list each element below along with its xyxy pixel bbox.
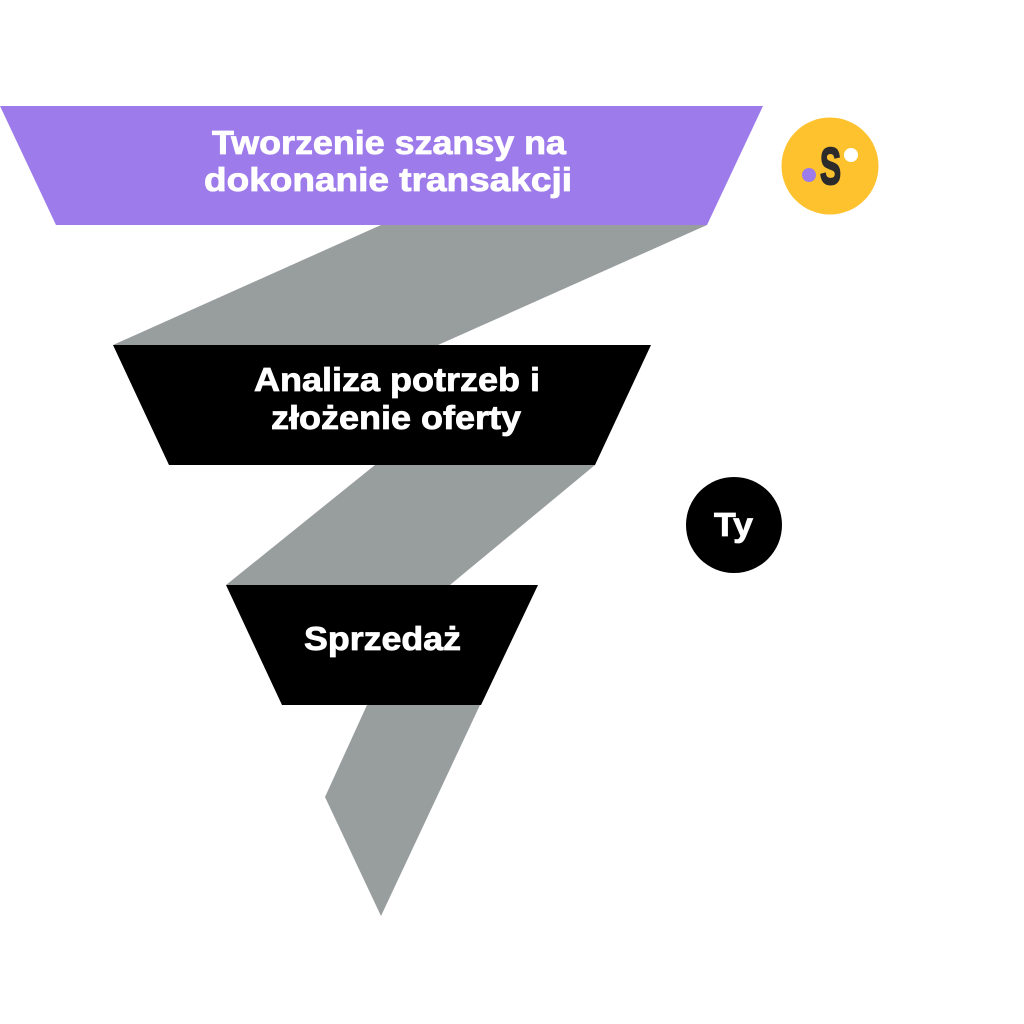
- funnel stage 2: black: Analiza potrzeb i: [254, 361, 540, 398]
- funnel stage 1: purple: dokonanie transakcji: [204, 161, 572, 198]
- funnel stage 1: purple: Tworzenie szansy na: [212, 124, 567, 161]
- funnel stage 2: black: [113, 345, 651, 465]
- Ty badge: [686, 477, 782, 573]
- Ty badge: Ty: [714, 506, 754, 543]
- funnel stage 1: purple: [0, 106, 763, 225]
- grey funnel ribbon: [113, 225, 707, 916]
- funnel stage 2: black: złożenie oferty: [271, 399, 522, 436]
- logo badge: [782, 118, 878, 214]
- logo badge: S: [820, 138, 841, 196]
- funnel stage 3: black: [226, 585, 538, 705]
- funnel stage 3: black: Sprzedaż: [304, 620, 461, 657]
